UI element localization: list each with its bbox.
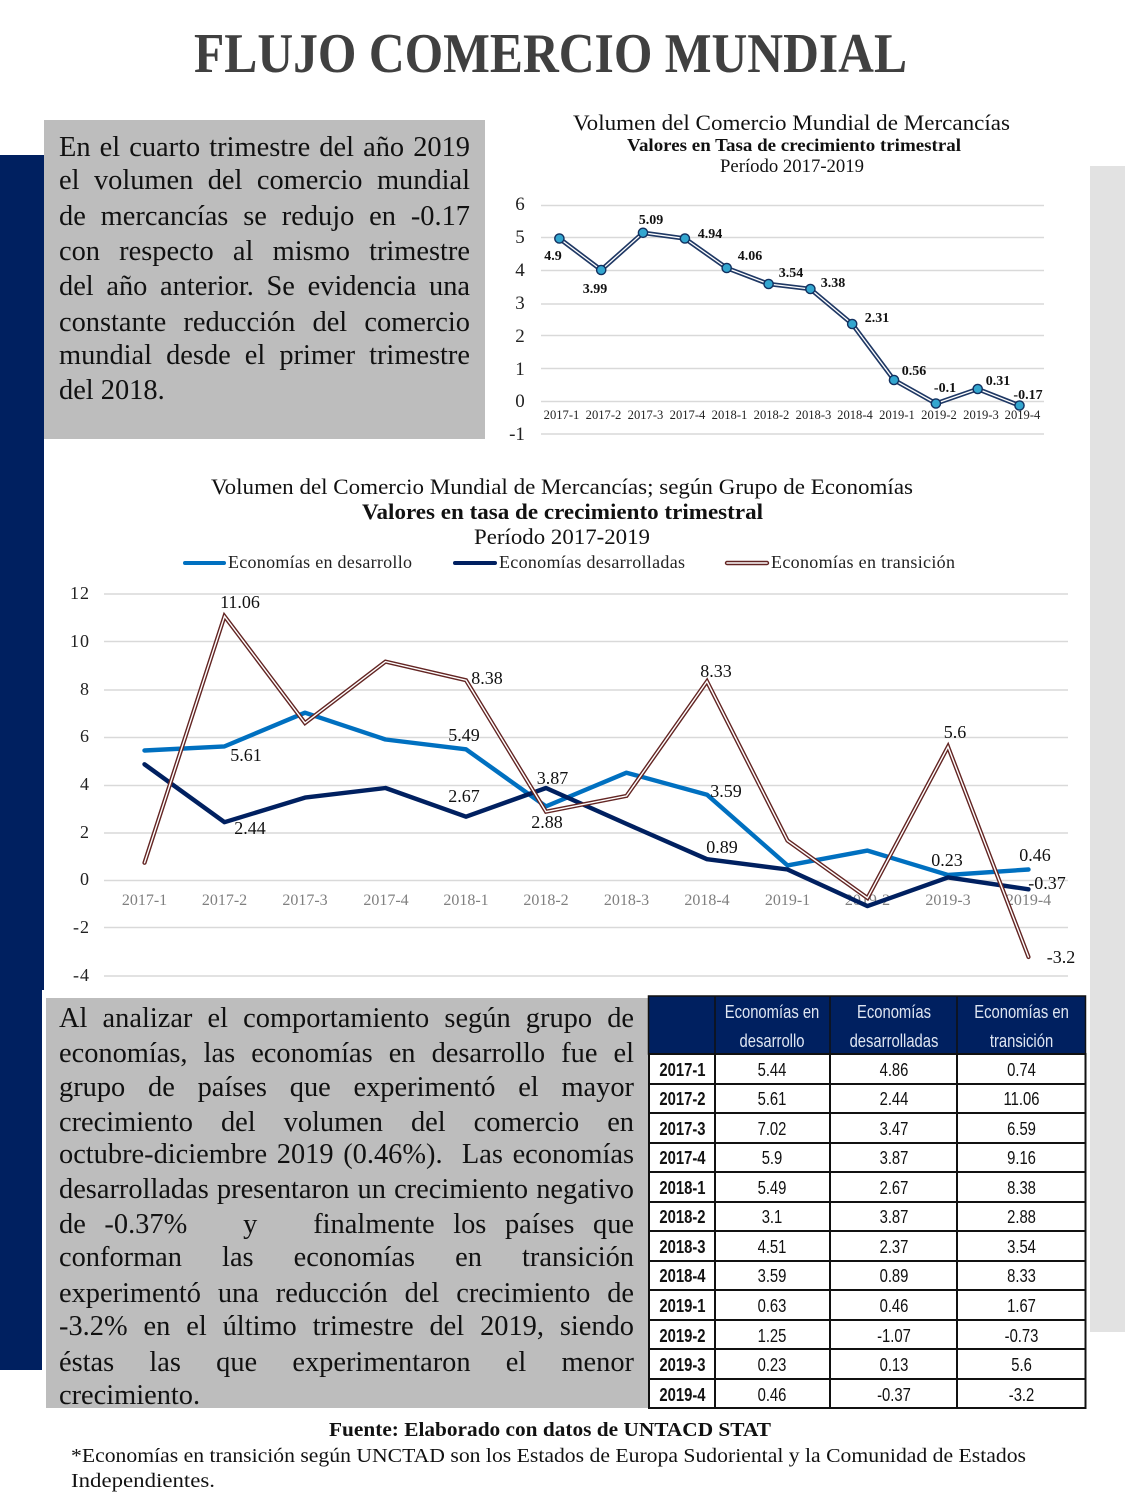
table text, horizontally condensed: 11.06 [1004,1088,1039,1109]
x axis labels: 2017-3 [628,408,663,422]
line: developed economies [144,764,1028,906]
table text, horizontally condensed: 0.74 [1007,1059,1036,1080]
table text, horizontally condensed: 2018-4 [659,1265,706,1286]
y axis labels: 6 [515,194,525,215]
table text, horizontally condensed: 2.67 [880,1177,908,1198]
y axis labels: 4 [80,774,90,794]
data labels: 0.56 [902,364,926,379]
data labels: 3.87 [537,768,568,788]
x axis labels: 2018-2 [754,408,789,422]
x axis labels: 2017-1 [122,892,167,909]
text panel: analysis paragraph: de -0.37% y finalmente los países que [59,1209,634,1240]
table text, horizontally condensed: 5.61 [758,1088,786,1109]
table text, horizontally condensed: 3.1 [762,1206,782,1227]
data labels: 3.54 [779,266,803,281]
table text, horizontally condensed: -0.37 [877,1384,911,1405]
table text, horizontally condensed: 8.38 [1007,1177,1036,1198]
chart heading: Valores en tasa de crecimiento trimestral [362,499,763,524]
data labels: 3.38 [821,276,845,291]
data labels [544,213,1043,403]
table text, horizontally condensed: -0.73 [1005,1325,1038,1346]
left navy bar [0,155,44,1370]
x axis labels: 2018-3 [604,892,649,909]
x axis labels: 2018-2 [523,892,569,909]
table text, horizontally condensed: 3.47 [880,1118,908,1139]
data labels: 3.99 [583,282,607,297]
text panel: analysis paragraph: crecimiento del volumen del comercio en [59,1107,634,1138]
table text, horizontally condensed: desarrolladas [850,1030,938,1051]
text panel: summary paragraph: del año anterior. Se evidencia una [59,271,470,302]
y axis labels: -4 [73,965,90,985]
text panel: summary paragraph: del 2018. [59,375,165,406]
table text, horizontally condensed: 7.02 [758,1118,786,1139]
data labels: 2.44 [234,818,266,838]
x axis labels: 2019-4 [1006,892,1051,909]
y axis labels: 6 [80,726,90,746]
table text, horizontally condensed: 2019-4 [659,1384,706,1405]
table text, horizontally condensed: 3.54 [1007,1236,1036,1257]
footnote [71,1446,1026,1492]
footnote: Independientes. [71,1471,215,1492]
chart heading: Valores en Tasa de crecimiento trimestral [627,135,961,155]
table text, horizontally condensed: Economías [857,1001,931,1022]
text panel: summary paragraph: mundial desde el primer trimestre [59,340,470,371]
y axis labels: 3 [515,293,525,314]
table text, horizontally condensed: 0.89 [880,1265,908,1286]
table text, horizontally condensed: 0.63 [758,1295,786,1316]
table text, horizontally condensed: 0.46 [880,1295,908,1316]
table text, horizontally condensed: -1.07 [877,1325,911,1346]
text panel: analysis paragraph: crecimiento. [59,1380,200,1411]
table text, horizontally condensed: transición [990,1030,1053,1051]
data labels: -3.2 [1047,947,1075,967]
data labels: 2.31 [865,311,889,326]
data labels: 2.67 [448,786,480,806]
table text, horizontally condensed: 1.67 [1007,1295,1036,1316]
chart heading [573,110,1010,177]
data labels: 4.94 [698,227,722,242]
text panel: analysis paragraph: economías, las economías en desarrollo fue el [59,1038,634,1069]
y axis labels: 2 [80,822,90,842]
table text, horizontally condensed: 2019-3 [659,1354,706,1375]
table text, horizontally condensed: 5.6 [1011,1354,1032,1375]
chart: trade volume by economic group [70,474,1075,985]
x axis labels: 2017-2 [202,892,247,909]
chart heading: Período 2017-2019 [720,157,864,177]
text panel: summary paragraph: de mercancías se redujo en -0.17 [59,201,470,232]
table text, horizontally condensed: 0.23 [758,1354,786,1375]
table text, horizontally condensed: 2017-2 [659,1088,706,1109]
chart heading: Volumen del Comercio Mundial de Mercancías [573,110,1010,135]
y axis labels: 0 [80,869,90,889]
text panel: analysis paragraph: desarrolladas presentaron un crecimiento negativo [59,1174,634,1205]
text panel: analysis paragraph: octubre-diciembre 2019 (0.46%). Las economías [59,1139,634,1170]
x axis labels: 2019-1 [879,408,915,422]
table text, horizontally condensed: 3.87 [880,1147,908,1168]
table text, horizontally condensed: 6.59 [1007,1118,1036,1139]
table text, horizontally condensed: 5.44 [758,1059,786,1080]
table text, horizontally condensed: 2.37 [880,1236,908,1257]
x axis labels: 2017-2 [586,408,621,422]
data labels: 0.31 [986,374,1010,389]
legend: Economías en desarrollo [228,552,412,572]
legend: Economías desarrolladas [499,552,685,572]
x axis labels: 2019-3 [963,408,999,422]
table text, horizontally condensed: desarrollo [740,1030,804,1051]
footnote: *Economías en transición según UNCTAD son los Estados de Europa Sudoriental y la Comunidad de Estados [71,1446,1026,1467]
table text, horizontally condensed: Economías en [725,1001,819,1022]
data labels: 0.89 [706,837,738,857]
x axis labels [544,408,1041,422]
table text, horizontally condensed: 3.87 [880,1206,908,1227]
y axis labels: 8 [80,679,90,699]
table text, horizontally condensed: -3.2 [1009,1384,1034,1405]
text panel: analysis paragraph: experimentó una reducción del crecimiento de [59,1278,634,1309]
data labels: 3.59 [710,781,742,801]
x axis labels: 2017-4 [670,408,706,422]
table grid [649,1054,1086,1408]
text panel: summary paragraph: En el cuarto trimestre del año 2019 [59,132,470,163]
source line: Fuente: Elaborado con datos de UNTACD STAT [329,1420,771,1441]
y axis labels: -1 [509,424,525,445]
x axis labels: 2018-1 [712,408,747,422]
line: transition economies [144,616,1028,957]
table text, horizontally condensed: 2017-3 [659,1118,706,1139]
x axis labels: 2017-4 [363,892,409,909]
text panel: summary paragraph: constante reducción del comercio [59,307,470,338]
table text, horizontally condensed: 2018-2 [659,1206,706,1227]
x axis labels: 2018-1 [443,892,489,909]
legend: Economías en transición [771,552,955,572]
table text, horizontally condensed: 4.86 [880,1059,908,1080]
x axis labels: 2019-3 [925,892,971,909]
y axis labels [70,583,90,985]
text panel: summary paragraph: el volumen del comercio mundial [59,165,470,196]
legend [185,552,955,572]
x axis labels [122,892,1051,909]
chart heading: Período 2017-2019 [474,524,650,549]
table text, horizontally condensed: Economías en [974,1001,1069,1022]
table text, horizontally condensed: 2018-3 [659,1236,706,1257]
chart: total merchandise trade volume [509,110,1044,445]
table text, horizontally condensed: 2017-4 [659,1147,706,1168]
table text, horizontally condensed: 2019-1 [659,1295,706,1316]
y axis labels: -2 [73,917,90,937]
y axis labels: 2 [515,326,525,347]
data labels: 8.33 [700,661,732,681]
line series [559,233,1020,406]
table text, horizontally condensed: 3.59 [758,1265,786,1286]
table text, horizontally condensed: 1.25 [758,1325,786,1346]
data labels: 11.06 [220,592,260,612]
data labels: 4.06 [738,249,762,264]
table text, horizontally condensed: 0.46 [758,1384,786,1405]
text panel: analysis paragraph: conforman las economías en transición [59,1242,634,1273]
line: developing economies [144,713,1028,875]
y axis labels: 5 [515,227,525,248]
y axis labels: 0 [515,391,525,412]
x axis labels: 2017-3 [282,892,328,909]
table text, horizontally condensed: 2019-2 [659,1325,706,1346]
table text, horizontally condensed [659,1001,1069,1405]
table header background [648,996,1086,1054]
data labels: 4.9 [544,249,562,264]
x axis labels: 2018-3 [796,408,831,422]
data labels: -0.37 [1028,873,1066,893]
chart heading: Volumen del Comercio Mundial de Mercancías; según Grupo de Economías [211,474,913,499]
table text, horizontally condensed: 5.49 [758,1177,786,1198]
x axis labels: 2018-4 [684,892,730,909]
table text, horizontally condensed: 5.9 [762,1147,782,1168]
table text, horizontally condensed: 2.44 [880,1088,908,1109]
table text, horizontally condensed: 0.13 [880,1354,908,1375]
y axis labels [509,194,525,445]
table text, horizontally condensed: 8.33 [1007,1265,1036,1286]
table text, horizontally condensed: 2017-1 [659,1059,706,1080]
right grey bar [1090,166,1125,1332]
data labels: -0.1 [934,381,956,396]
y axis labels: 12 [70,583,90,603]
table text, horizontally condensed: 2018-1 [659,1177,706,1198]
text panel: analysis paragraph: Al analizar el comportamiento según grupo de [59,1003,634,1034]
x axis labels: 2019-1 [765,892,810,909]
data table [648,996,1086,1408]
y axis labels: 4 [515,260,525,281]
data labels: 0.23 [931,850,963,870]
text panel: analysis paragraph: éstas las que experimentaron el menor [59,1347,634,1378]
data labels: 5.6 [944,722,966,742]
data labels: 5.49 [448,725,480,745]
data labels: -0.17 [1013,388,1043,403]
text panel: summary paragraph: con respecto al mismo trimestre [59,236,470,267]
data labels: 8.38 [471,668,503,688]
x axis labels: 2019-2 [845,892,890,909]
data labels [220,592,1075,967]
data labels: 0.46 [1019,845,1051,865]
table text, horizontally condensed: 9.16 [1007,1147,1036,1168]
text panel: analysis paragraph: -3.2% en el último trimestre del 2019, siendo [59,1311,634,1342]
table text, horizontally condensed: 4.51 [758,1236,786,1257]
title: FLUJO COMERCIO MUNDIAL [194,23,907,85]
chart heading [211,474,913,549]
y axis labels: 10 [70,631,90,651]
y axis labels: 1 [515,359,525,380]
text panel: analysis paragraph [46,998,648,1408]
x axis labels: 2017-1 [544,408,579,422]
table text, horizontally condensed: 2.88 [1007,1206,1036,1227]
data labels: 5.09 [639,213,663,228]
data labels: 5.61 [230,745,262,765]
markers [555,228,1024,410]
x axis labels: 2019-2 [921,408,957,422]
x axis labels: 2019-4 [1005,408,1041,422]
text panel: summary paragraph [44,120,485,439]
text panel: analysis paragraph: grupo de países que experimentó el mayor [59,1072,634,1103]
data labels: 2.88 [531,812,563,832]
x axis labels: 2018-4 [837,408,874,422]
